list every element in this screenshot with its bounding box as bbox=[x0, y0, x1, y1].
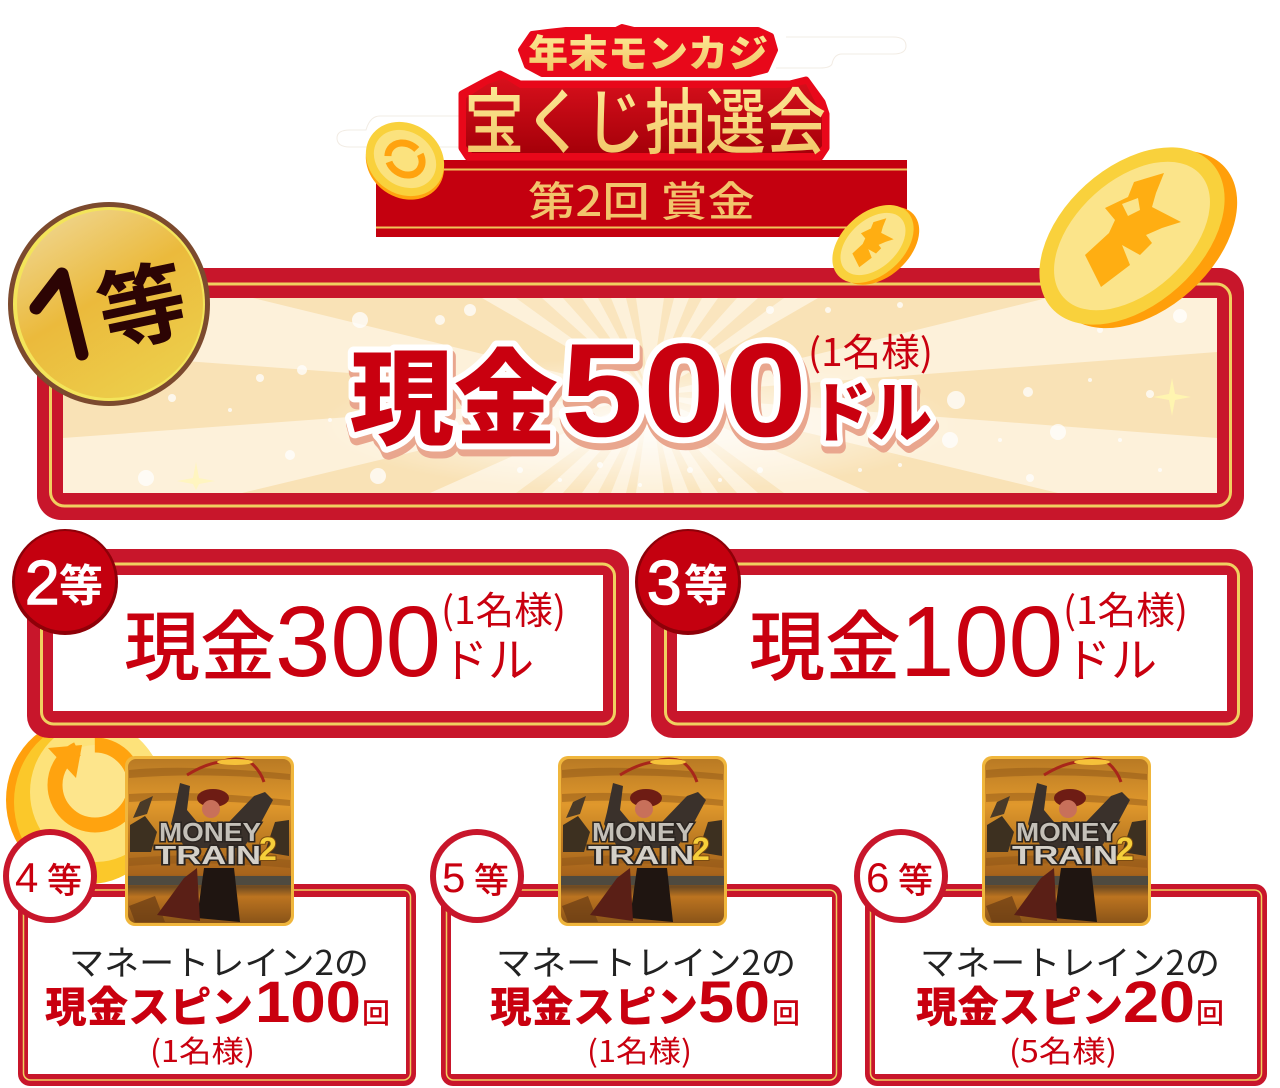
panel: first prize bbox=[37, 268, 1244, 520]
badge: third prize: 等 bbox=[684, 550, 728, 614]
coin: small fox bbox=[817, 188, 934, 302]
fourth prize text: (1名様) bbox=[150, 1027, 255, 1071]
fourth prize text bbox=[45, 936, 390, 1071]
badge: sixth prize: 等 bbox=[898, 853, 933, 904]
coin: behind 4th prize bbox=[6, 718, 166, 884]
game tile: Money Train 2: TRAIN bbox=[155, 840, 261, 870]
sixth prize text: 回 bbox=[1196, 992, 1224, 1032]
game tile: Money Train 2: 2 bbox=[1116, 831, 1134, 867]
third prize amount: 100 bbox=[900, 586, 1063, 698]
first prize amount: 500 bbox=[563, 323, 809, 471]
badge: sixth prize: 6 bbox=[866, 854, 889, 901]
coin: top left bbox=[350, 107, 460, 215]
fifth prize text: 現金スピン bbox=[490, 974, 698, 1035]
panel: third prize bbox=[651, 549, 1253, 738]
badge: second prize: 等 bbox=[59, 550, 103, 614]
second prize amount: 現金 bbox=[124, 586, 276, 696]
badge: sixth prize bbox=[857, 832, 945, 920]
game tile: Money Train 2 bbox=[558, 756, 727, 926]
fifth prize text: 回 bbox=[772, 992, 800, 1032]
panel: fourth prize bbox=[18, 884, 416, 1086]
game tile: Money Train 2 bbox=[125, 756, 294, 926]
sixth prize text: 20 bbox=[1123, 970, 1195, 1035]
badge: first prize: 等 bbox=[85, 230, 197, 372]
third prize amount: (1名様) bbox=[1063, 580, 1188, 635]
panel: sixth prize bbox=[865, 884, 1267, 1086]
first prize amount: ドル bbox=[810, 360, 932, 456]
badge: third prize bbox=[635, 529, 741, 635]
badge: fifth prize: 等 bbox=[474, 853, 509, 904]
fourth prize text: 回 bbox=[362, 992, 390, 1032]
fifth prize text: (1名様) bbox=[587, 1027, 692, 1071]
game tile: Money Train 2: 2 bbox=[692, 831, 710, 867]
game tile: Money Train 2: MONEY bbox=[159, 817, 261, 847]
first prize amount: ドル bbox=[812, 366, 934, 462]
game tile: Money Train 2 bbox=[982, 756, 1151, 926]
first prize amount: 現金 bbox=[352, 321, 560, 472]
title ribbon band bbox=[376, 160, 907, 237]
badge: second prize bbox=[12, 529, 118, 635]
second prize amount: (1名様) bbox=[441, 580, 566, 635]
decorative cloud outline right bbox=[776, 37, 906, 68]
sixth prize text: 現金スピン bbox=[916, 974, 1123, 1035]
second prize amount: 300 bbox=[275, 586, 441, 698]
title lottery banner: 宝くじ抽選会 bbox=[464, 65, 826, 170]
sixth prize text: マネートレイン2の bbox=[920, 936, 1220, 985]
fourth prize text: マネートレイン2の bbox=[69, 936, 369, 985]
first prize amount bbox=[350, 315, 934, 472]
fifth prize text: 50 bbox=[698, 970, 770, 1035]
panel: second prize bbox=[27, 549, 629, 738]
third prize amount: ドル bbox=[1065, 622, 1157, 691]
coin: large fox bbox=[1006, 108, 1271, 368]
third prize amount bbox=[749, 580, 1188, 698]
game tile: Money Train 2: MONEY bbox=[592, 817, 694, 847]
second prize amount bbox=[124, 580, 566, 698]
game tile: Money Train 2: TRAIN bbox=[588, 840, 694, 870]
badge: fourth prize: 等 bbox=[47, 853, 82, 904]
badge: second prize: 2 bbox=[25, 549, 59, 618]
badge: fourth prize: 4 bbox=[15, 854, 38, 901]
first prize amount: 500 bbox=[561, 317, 807, 465]
title brand banner: 年末モンカジ bbox=[528, 23, 768, 78]
badge: fifth prize: 5 bbox=[442, 854, 465, 901]
second prize amount: ドル bbox=[442, 622, 534, 691]
title logo bbox=[376, 23, 907, 237]
sixth prize text bbox=[916, 936, 1224, 1071]
badge: third prize: 3 bbox=[647, 549, 681, 618]
fifth prize text bbox=[490, 936, 800, 1071]
game tile: Money Train 2: 2 bbox=[259, 831, 277, 867]
sixth prize text: (5名様) bbox=[1009, 1027, 1117, 1071]
game tile: Money Train 2: TRAIN bbox=[1012, 840, 1118, 870]
game tile: Money Train 2: MONEY bbox=[1016, 817, 1118, 847]
sunburst background bbox=[63, 298, 1217, 493]
fourth prize text: 現金スピン bbox=[45, 974, 253, 1035]
first prize amount: 現金 bbox=[350, 315, 558, 466]
badge: fifth prize bbox=[433, 832, 521, 920]
third prize amount: 現金 bbox=[749, 586, 901, 696]
badge: first prize bbox=[8, 202, 210, 406]
badge: fourth prize bbox=[6, 832, 94, 920]
fourth prize text: 100 bbox=[255, 970, 361, 1035]
fifth prize text: マネートレイン2の bbox=[496, 936, 796, 985]
decorative cloud outline left bbox=[337, 116, 470, 147]
first prize amount: (1名様) bbox=[808, 322, 933, 377]
panel: fifth prize bbox=[441, 884, 842, 1086]
title ribbon band: 第2回 賞金 bbox=[528, 168, 755, 228]
